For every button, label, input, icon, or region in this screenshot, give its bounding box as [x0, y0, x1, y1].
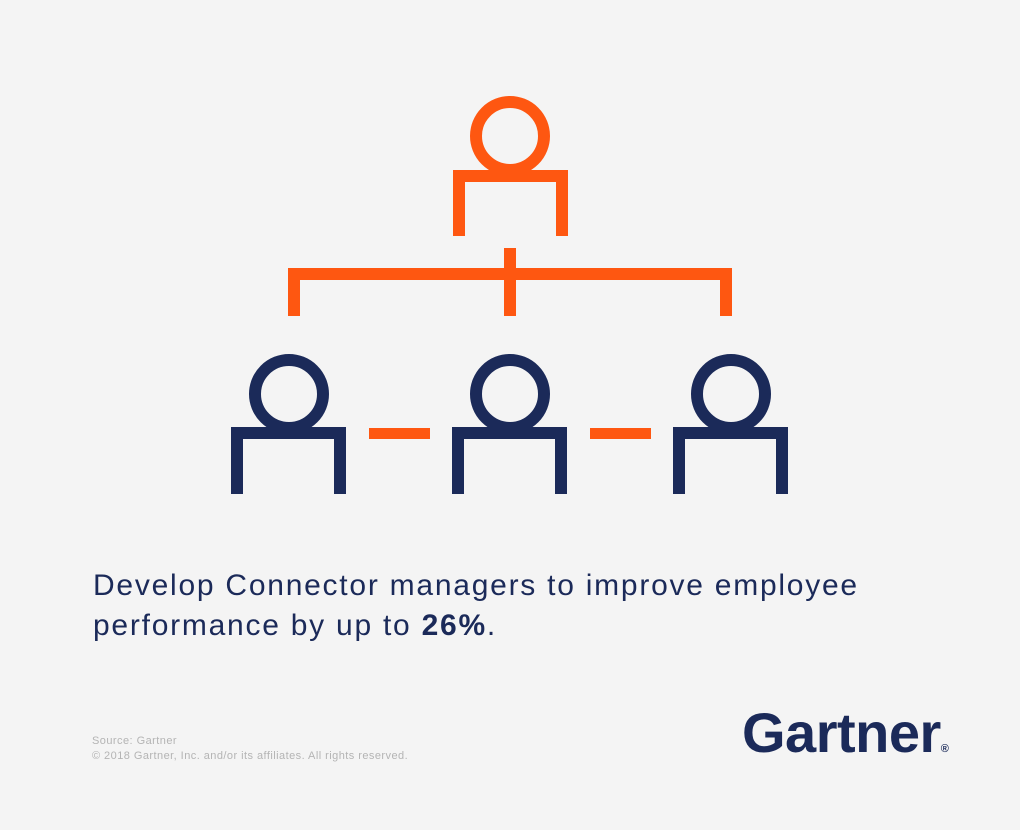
headline text: performance by up to 26%.: [93, 609, 497, 642]
icon: top manager: [459, 102, 562, 236]
source note: Source: Gartner: [92, 735, 177, 747]
source note: © 2018 Gartner, Inc. and/or its affiliates. All rights reserved.: [92, 750, 408, 762]
connector bracket: [294, 248, 726, 316]
source note: [92, 735, 408, 762]
headline text: [93, 569, 859, 642]
org chart illustration: [231, 96, 788, 494]
logo: Gartner: Gartner®: [742, 701, 949, 764]
headline text: Develop Connector managers to improve employee: [93, 569, 859, 602]
peer connector dashes: [369, 428, 651, 439]
icon: employees: [237, 360, 782, 494]
